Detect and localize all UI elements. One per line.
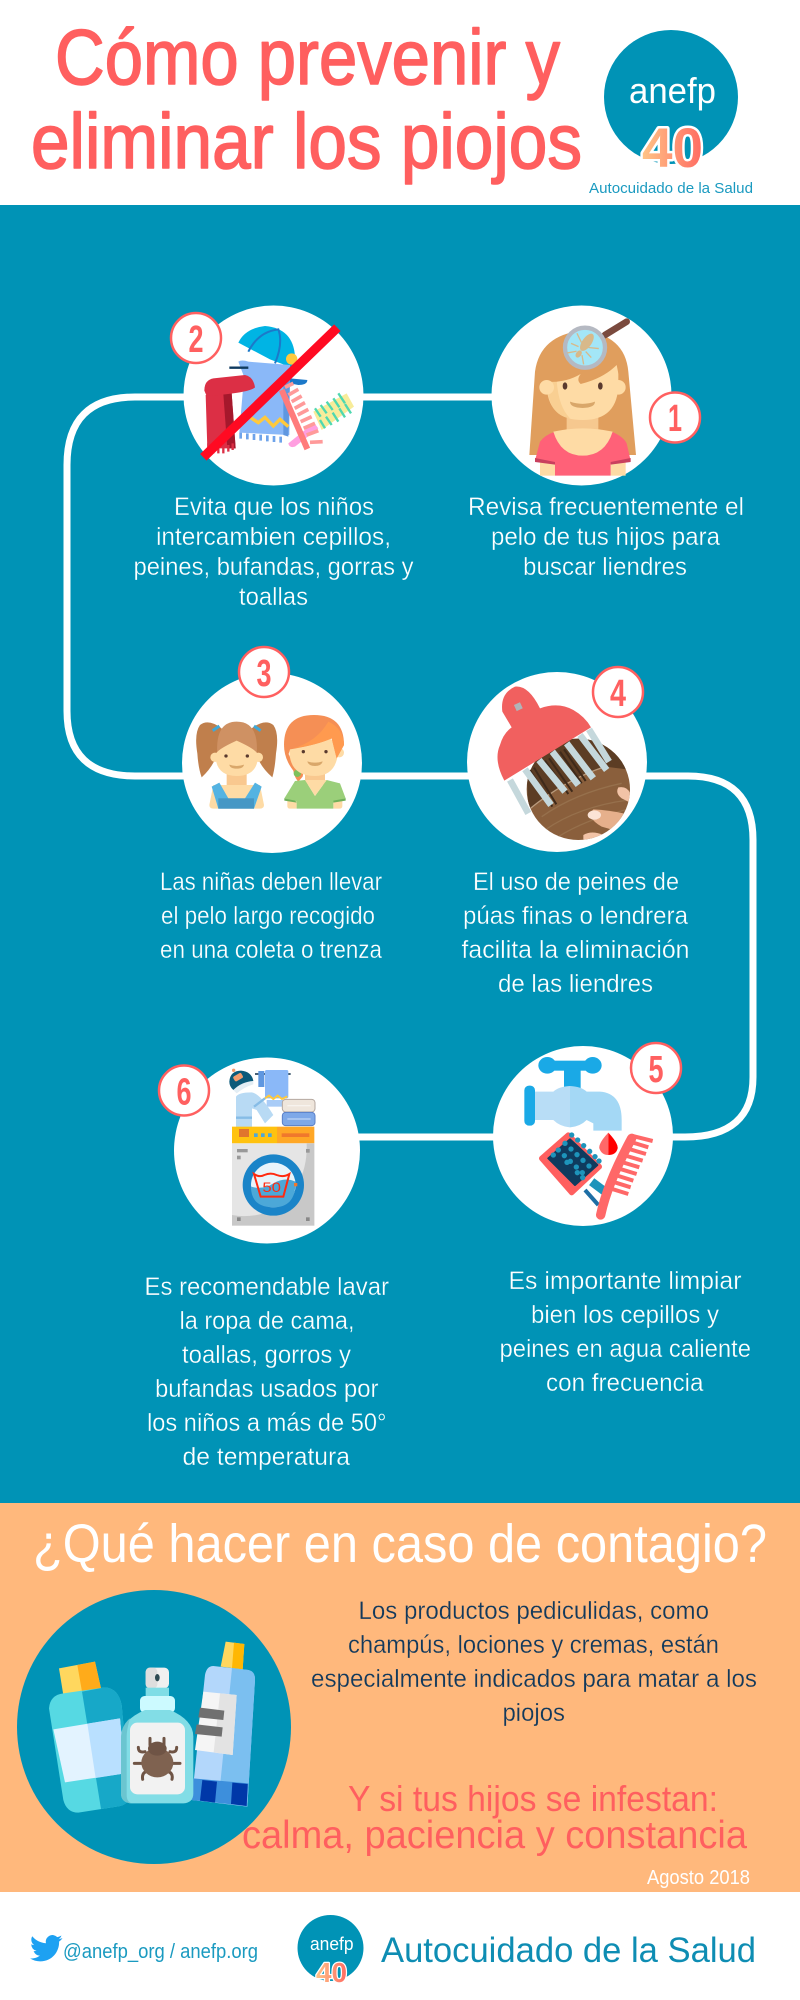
icon: washing machine: 50 [262, 1179, 281, 1195]
header panel [0, 0, 800, 205]
title: Cómo prevenir y [55, 13, 560, 101]
step 3 [160, 647, 382, 964]
text: step 3: en una coleta o trenza [160, 936, 382, 964]
text: step 2: peines, bufandas, gorras y [134, 553, 414, 581]
badge: 3 [239, 647, 289, 697]
text: step 3: el pelo largo recogido [161, 902, 375, 930]
icon: girls with ponytail and braid [196, 715, 346, 809]
logo: anefp 40: Autocuidado de la Salud [589, 180, 753, 197]
icon: washing machine [229, 1069, 315, 1226]
text: pediculicide products [311, 1597, 757, 1727]
text: pediculicide products: piojos [502, 1699, 565, 1727]
footer [0, 1892, 800, 2000]
text: step 5: bien los cepillos y [531, 1301, 719, 1329]
text: step 4: facilita la eliminación [462, 936, 690, 964]
text: step 3 [160, 868, 382, 964]
badge: 1: 1 [668, 398, 682, 440]
step 1 [468, 306, 744, 581]
text: step 2: intercambien cepillos, [156, 523, 391, 551]
text: step 1: pelo de tus hijos para [491, 523, 720, 551]
text: step 5 [500, 1267, 751, 1397]
text: step 5: con frecuencia [546, 1369, 704, 1397]
logo: anefp 40 small [298, 1915, 364, 1988]
badge: 4: 4 [610, 673, 626, 715]
text: step 4: de las liendres [498, 970, 653, 998]
date: Agosto 2018 [647, 1867, 750, 1889]
logo: anefp 40: anefp [629, 70, 716, 111]
text: step 5: Es importante limpiar [508, 1267, 742, 1295]
icon: fine comb on hair [497, 687, 632, 842]
text: step 6: Es recomendable lavar [144, 1273, 389, 1301]
text: step 2: toallas [239, 583, 308, 611]
icon: girl with magnifier [529, 322, 636, 476]
text: step 6: los niños a más de 50° [147, 1409, 386, 1437]
callout: calm, patience and constancy: Y si tus hijos se infestan: [348, 1778, 718, 1819]
text: step 6 [144, 1273, 389, 1471]
logo: anefp 40 small: anefp [310, 1934, 354, 1954]
text: step 6: de temperatura [182, 1443, 350, 1471]
logo: anefp 40 [589, 30, 753, 197]
badge: 1 [650, 392, 700, 442]
panel: what to do in case of contagion [0, 1503, 800, 1892]
step 5 [493, 1043, 751, 1397]
badge: 4 [593, 667, 643, 717]
text: step 6: la ropa de cama, [180, 1307, 354, 1335]
logo: anefp 40 small: 40 [316, 1957, 347, 1988]
text: pediculicide products: especialmente indicados para matar a los [311, 1665, 757, 1693]
text: step 1 [468, 493, 744, 581]
badge: 3: 3 [256, 653, 272, 695]
step 4 [462, 667, 690, 998]
text: step 4: El uso de peines de [473, 868, 679, 896]
icon: tap, brush and comb [524, 1057, 653, 1215]
tagline: Autocuidado de la Salud [381, 1931, 756, 1970]
text: step 6: toallas, gorros y [182, 1341, 351, 1369]
social handles: @anefp_org / anefp.org [63, 1941, 258, 1963]
text: step 3: Las niñas deben llevar [160, 868, 382, 896]
panel: prevention steps [0, 205, 800, 1503]
badge: 2: 2 [188, 319, 204, 361]
step 6 [144, 1058, 389, 1471]
icon: no sharing items [203, 326, 354, 457]
text: step 2 [134, 493, 414, 611]
title: eliminar los piojos [31, 97, 582, 185]
badge: 6: 6 [176, 1072, 192, 1114]
text: step 2: Evita que los niños [174, 493, 374, 521]
badge: 5 [631, 1043, 681, 1093]
arrow: connecting path through steps [67, 397, 753, 1137]
badge: 5: 5 [648, 1049, 664, 1091]
step 2 [134, 306, 414, 611]
icon: twitter bird [30, 1935, 62, 1961]
text: step 1: buscar liendres [523, 553, 687, 581]
text: pediculicide products: Los productos pediculidas, como [358, 1597, 709, 1625]
callout: calm, patience and constancy [242, 1778, 747, 1857]
title [31, 13, 582, 185]
illustration: product bottles [17, 1590, 291, 1864]
text: step 4 [462, 868, 690, 998]
text: step 6: bufandas usados por [155, 1375, 378, 1403]
badge: 2 [171, 313, 221, 363]
badge: 6 [159, 1066, 209, 1116]
text: step 4: púas finas o lendrera [463, 902, 688, 930]
text: step 5: peines en agua caliente [500, 1335, 751, 1363]
text: step 1: Revisa frecuentemente el [468, 493, 744, 521]
text: pediculicide products: champús, lociones y cremas, están [348, 1631, 719, 1659]
logo: anefp 40: 40 [642, 116, 703, 179]
callout: calm, patience and constancy: calma, paciencia y constancia [242, 1814, 747, 1857]
